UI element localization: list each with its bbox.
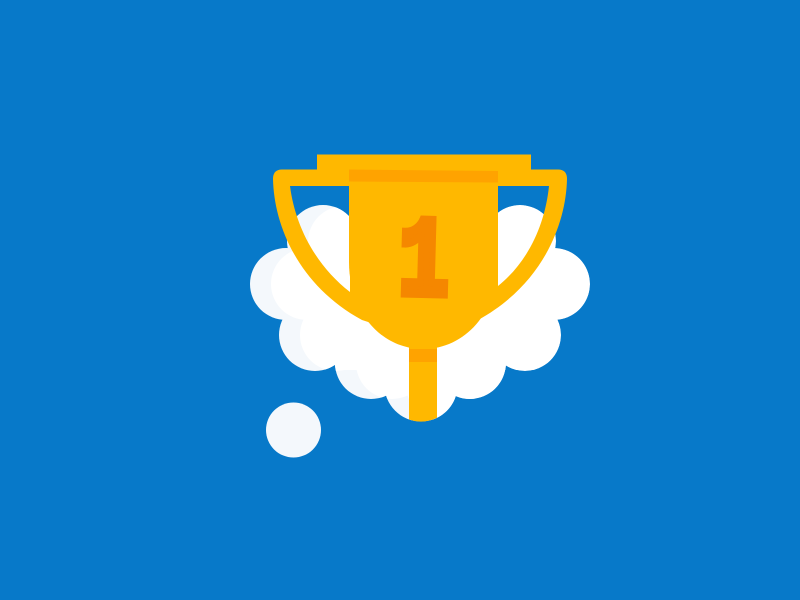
trophy	[273, 154, 567, 422]
trophy cup	[349, 170, 498, 349]
number one: 1	[397, 199, 451, 329]
cup band	[349, 170, 498, 182]
illustration: trophy on a thought cloud	[250, 154, 590, 458]
trophy rim	[317, 154, 531, 170]
trophy stem	[409, 340, 437, 422]
small thought bubble	[266, 402, 321, 458]
trophy handles	[273, 170, 567, 340]
thought cloud	[250, 205, 590, 422]
